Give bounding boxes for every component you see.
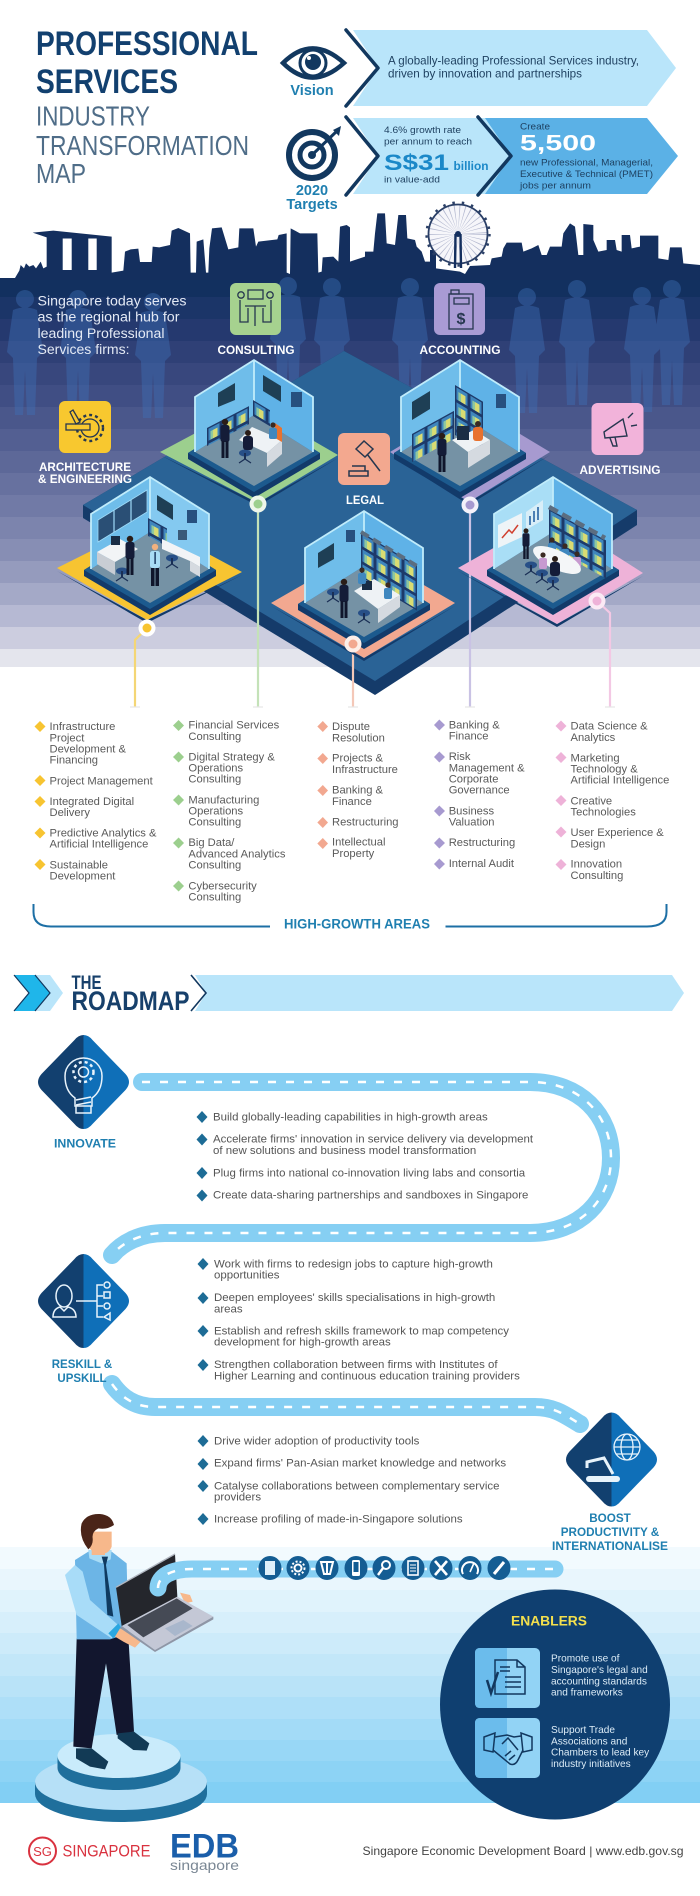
vision banner <box>346 30 676 106</box>
list: architecture and engineering: Predictive Analytics & <box>50 828 157 840</box>
bullets: boost: providers <box>214 1491 261 1503</box>
road: innovate to reskill <box>112 1082 611 1255</box>
room: legal <box>271 511 455 661</box>
list: advertising: Data Science & <box>570 721 648 733</box>
targets banner: billion <box>454 161 488 173</box>
targets banner: 5,500 <box>520 131 596 156</box>
list: consulting: Big Data/ <box>188 837 235 849</box>
intro text <box>38 294 187 357</box>
list: architecture and engineering: Development & <box>50 743 127 755</box>
list: legal: Restructuring <box>332 816 399 828</box>
logo: sg singapore: SINGAPORE <box>62 1842 150 1861</box>
list: consulting: Consulting <box>188 891 241 903</box>
person with laptop <box>65 1514 213 1769</box>
list: architecture and engineering: Artificial Intelligence <box>50 839 148 851</box>
high-growth areas bracket: HIGH-GROWTH AREAS <box>284 916 430 932</box>
targets banner <box>346 117 678 195</box>
room: advertising <box>458 477 643 627</box>
list: consulting: Manufacturing <box>188 794 259 806</box>
bullets: boost: Catalyse collaborations between complementary service <box>214 1480 499 1492</box>
list: architecture and engineering <box>34 721 157 882</box>
list: legal: Dispute <box>332 721 370 733</box>
list: architecture and engineering: Sustainable <box>50 859 108 871</box>
list: consulting: Consulting <box>188 860 241 872</box>
road: productivity tools <box>158 1569 555 1588</box>
label: accounting: ACCOUNTING <box>420 345 501 357</box>
tile: accounting <box>434 283 485 335</box>
text: associations enabler <box>551 1725 650 1770</box>
list: legal <box>317 721 399 860</box>
targets banner: per annum to reach <box>384 136 472 148</box>
text: standards enabler: Singapore's legal and <box>551 1665 648 1676</box>
text: standards enabler <box>551 1654 648 1699</box>
list: advertising <box>556 720 669 882</box>
list: advertising: Marketing <box>570 752 620 764</box>
list: advertising: Creative <box>570 795 612 807</box>
room: architecture and engineering <box>57 477 242 623</box>
vision banner: A globally-leading Professional Services industry, <box>388 54 639 68</box>
roadmap header banner: THE <box>72 973 102 994</box>
logo: sg singapore <box>29 1838 150 1864</box>
list: advertising: User Experience & <box>570 827 664 839</box>
list: architecture and engineering: Delivery <box>50 807 90 819</box>
list: consulting: Operations <box>188 806 244 818</box>
road: reskill to boost <box>112 1384 580 1424</box>
targets banner: jobs per annum <box>519 180 591 192</box>
title: TRANSFORMATION <box>36 130 249 161</box>
list: consulting: Consulting <box>188 774 241 786</box>
label: architecture and engineering: ARCHITECTURE <box>39 462 131 474</box>
room: consulting <box>160 360 338 506</box>
bullets: reskill: areas <box>214 1303 243 1315</box>
list: accounting: Banking & <box>449 719 500 731</box>
tile: accounting: $ <box>457 311 466 328</box>
bullets: innovate <box>196 1111 534 1202</box>
title: SERVICES <box>36 63 178 101</box>
list: accounting: Management & <box>449 762 525 774</box>
tile: legal <box>338 433 390 485</box>
room: accounting <box>390 360 550 505</box>
intro text: Singapore today serves <box>38 294 187 309</box>
footer text: Singapore Economic Development Board | www.edb.gov.sg <box>362 1844 684 1858</box>
title <box>36 25 258 189</box>
bottom light-blue band <box>0 1547 700 1803</box>
vision label: Vision <box>290 83 334 99</box>
bullets: boost: Expand firms' Pan-Asian market knowledge and networks <box>214 1458 506 1470</box>
targets banner: Executive & Technical (PMET) <box>520 169 653 180</box>
connector dots <box>138 496 606 652</box>
text: associations enabler: Chambers to lead key <box>551 1748 650 1759</box>
diamond icon: boost <box>566 1412 657 1506</box>
list: accounting: Business <box>449 805 495 817</box>
bullets: innovate: Plug firms into national co-innovation living labs and consortia <box>213 1167 526 1179</box>
list: legal: Resolution <box>332 732 385 744</box>
list: consulting: Cybersecurity <box>188 880 257 892</box>
list: architecture and engineering: Project <box>50 732 85 744</box>
panel: enablers: ENABLERS <box>511 1614 587 1629</box>
city skyline <box>0 213 700 280</box>
logo: sg singapore: SG <box>33 1844 52 1859</box>
diamond icon: innovate <box>38 1035 129 1129</box>
intro text: as the regional hub for <box>38 310 180 325</box>
icon tile: document check <box>475 1648 540 1708</box>
bullets: innovate: of new solutions and business model transformation <box>213 1145 476 1157</box>
targets banner: 4.6% growth rate <box>384 125 461 136</box>
label: architecture and engineering: & ENGINEERING <box>38 474 132 486</box>
bullets: boost <box>198 1435 506 1526</box>
podium <box>35 1734 207 1822</box>
label: advertising: ADVERTISING <box>580 465 661 477</box>
bullets: innovate: Build globally-leading capabilities in high-growth areas <box>213 1111 488 1123</box>
list: advertising: Innovation <box>570 859 622 871</box>
label: boost <box>552 1512 668 1553</box>
targets label: 2020 <box>296 183 328 199</box>
list: legal: Property <box>332 848 375 860</box>
icon tile: handshake <box>475 1718 540 1778</box>
list: architecture and engineering: Infrastructure <box>50 721 115 733</box>
label: innovate: INNOVATE <box>54 1136 116 1150</box>
productivity tool icons <box>258 1556 510 1580</box>
list: advertising: Technology & <box>570 764 638 776</box>
list: consulting <box>173 720 286 903</box>
list: advertising: Analytics <box>570 732 616 744</box>
tile: advertising <box>592 403 644 455</box>
bullets: innovate: Create data-sharing partnerships and sandboxes in Singapore <box>213 1190 528 1202</box>
label: reskill and upskill: RESKILL & <box>52 1359 112 1371</box>
list: legal: Projects & <box>332 753 384 765</box>
list: accounting: Finance <box>449 731 489 743</box>
bullets: boost: Increase profiling of made-in-Singapore solutions <box>214 1514 463 1526</box>
list: consulting: Digital Strategy & <box>188 751 275 763</box>
list: consulting: Consulting <box>188 731 241 743</box>
list: advertising: Design <box>570 838 605 850</box>
bullets: reskill: Higher Learning and continuous education training providers <box>214 1370 520 1382</box>
list: accounting: Internal Audit <box>449 858 515 870</box>
isometric platform <box>83 351 637 695</box>
targets banner: Create <box>520 122 550 132</box>
list: accounting <box>434 719 525 870</box>
label: boost: INTERNATIONALISE <box>552 1540 668 1553</box>
list: legal: Infrastructure <box>332 764 398 776</box>
bullets: reskill: development for high-growth areas <box>214 1337 391 1349</box>
tile: consulting <box>230 283 281 335</box>
targets banner: new Professional, Managerial, <box>520 158 653 169</box>
list: architecture and engineering: Project Management <box>50 775 154 787</box>
list: advertising: Technologies <box>570 807 636 819</box>
targets label: Targets <box>286 197 338 213</box>
bullets: reskill: opportunities <box>214 1270 280 1282</box>
list: legal: Intellectual <box>332 837 386 849</box>
roadmap header banner: ROADMAP <box>72 986 190 1016</box>
targets banner: S$31 <box>384 150 449 175</box>
panel: enablers <box>440 1590 670 1820</box>
list: advertising: Consulting <box>570 870 623 882</box>
list: consulting: Financial Services <box>188 720 280 732</box>
targets label <box>286 183 338 213</box>
text: standards enabler: Promote use of <box>551 1654 620 1665</box>
intro text: leading Professional <box>38 326 165 341</box>
list: consulting: Consulting <box>188 817 241 829</box>
logo: edb singapore: singapore <box>170 1857 239 1873</box>
targets banner: in value-add <box>384 174 440 186</box>
label: consulting: CONSULTING <box>218 345 295 357</box>
list: legal: Banking & <box>332 785 384 797</box>
bullets: reskill <box>198 1258 520 1382</box>
title: INDUSTRY <box>36 100 150 132</box>
list: consulting: Operations <box>188 763 244 775</box>
bullets: reskill: Establish and refresh skills framework to map competency <box>214 1326 509 1338</box>
label: reskill and upskill <box>52 1359 112 1385</box>
logo: edb singapore: EDB <box>170 1828 239 1866</box>
title: MAP <box>36 158 86 189</box>
bullets: reskill: Work with firms to redesign jobs to capture high-growth <box>214 1258 493 1270</box>
connectors <box>130 504 615 707</box>
singapore flyer <box>426 202 490 268</box>
vision banner: driven by innovation and partnerships <box>388 68 582 80</box>
list: accounting: Corporate <box>449 774 498 786</box>
roadmap header banner <box>14 973 684 1016</box>
banded navy background <box>0 278 700 667</box>
label: architecture and engineering <box>38 462 132 486</box>
text: associations enabler: Support Trade <box>551 1725 615 1736</box>
label: boost: BOOST <box>589 1512 632 1525</box>
intro text: Services firms: <box>38 342 130 357</box>
list: accounting: Governance <box>449 785 510 797</box>
bullets: innovate: Accelerate firms' innovation in service delivery via development <box>213 1134 534 1146</box>
list: architecture and engineering: Development <box>50 870 116 882</box>
bullets: reskill: Strengthen collaboration between firms with Institutes of <box>214 1359 498 1371</box>
list: accounting: Risk <box>449 751 471 763</box>
icon: eye <box>283 48 344 78</box>
text: standards enabler: accounting standards <box>551 1676 647 1687</box>
bullets: boost: Drive wider adoption of productivity tools <box>214 1435 420 1447</box>
label: reskill and upskill: UPSKILL <box>57 1373 107 1385</box>
diamond icon: reskill <box>38 1254 129 1348</box>
text: associations enabler: industry initiatives <box>551 1759 631 1770</box>
list: accounting: Restructuring <box>449 837 515 849</box>
list: architecture and engineering: Financing <box>50 755 98 767</box>
text: standards enabler: and frameworks <box>551 1688 623 1699</box>
list: architecture and engineering: Integrated Digital <box>50 796 134 808</box>
list: accounting: Valuation <box>449 817 495 829</box>
list: legal: Finance <box>332 796 372 808</box>
text: associations enabler: Associations and <box>551 1736 627 1747</box>
title: PROFESSIONAL <box>36 25 258 63</box>
silhouettes of people <box>7 277 690 418</box>
tile: architecture <box>59 401 111 453</box>
bullets: reskill: Deepen employees' skills specialisations in high-growth <box>214 1292 495 1304</box>
label: boost: PRODUCTIVITY & <box>561 1526 660 1539</box>
icon: target <box>289 126 341 178</box>
list: consulting: Advanced Analytics <box>188 848 286 860</box>
high-growth areas bracket <box>34 904 666 932</box>
list: advertising: Artificial Intelligence <box>570 775 669 787</box>
label: legal: LEGAL <box>346 495 384 507</box>
